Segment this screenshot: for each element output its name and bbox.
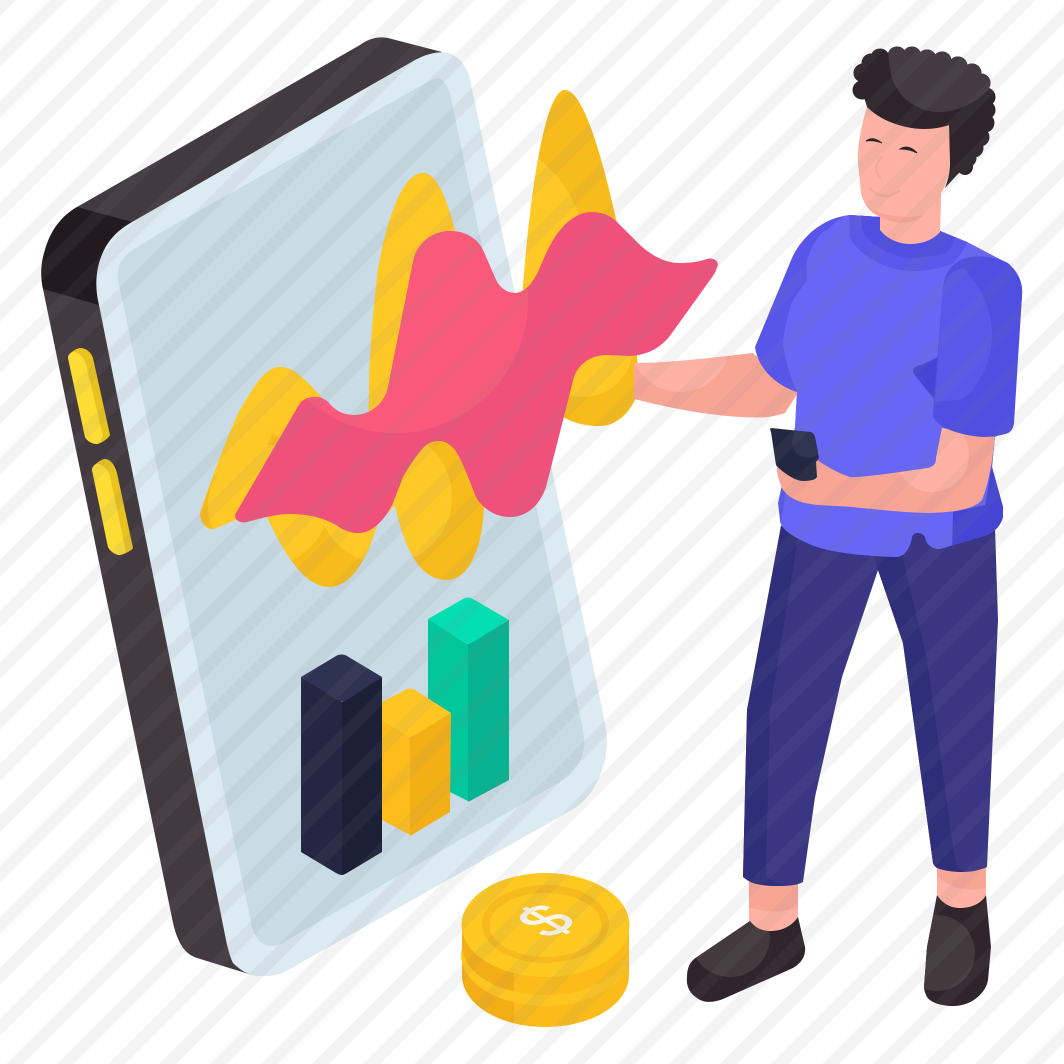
red wave xyxy=(235,212,718,533)
underarm shadow xyxy=(913,357,938,399)
extended arm xyxy=(634,353,797,418)
holding arm xyxy=(776,428,995,513)
dark bar xyxy=(301,654,382,875)
eye right xyxy=(900,147,917,153)
green bar xyxy=(428,598,509,802)
left shoe xyxy=(686,917,806,1002)
phone dark body xyxy=(41,37,442,975)
yellow bar xyxy=(382,688,451,836)
right sleeve xyxy=(933,256,1022,437)
neck overlap xyxy=(880,200,941,244)
hair xyxy=(852,46,996,188)
shirt xyxy=(755,215,1022,557)
phone glass frame xyxy=(96,52,607,976)
coin stack xyxy=(461,873,630,1027)
shirt light body xyxy=(781,215,1022,557)
phone screen xyxy=(118,78,584,946)
left ankle xyxy=(749,870,798,935)
collar outer ring xyxy=(849,212,967,271)
person xyxy=(630,40,1030,1006)
collar inner ring xyxy=(861,212,954,258)
coin top face xyxy=(462,873,630,977)
upper coin side xyxy=(462,925,629,995)
coin ring xyxy=(482,885,609,963)
right shoe xyxy=(924,895,991,1006)
pants xyxy=(743,500,998,886)
lower coin side xyxy=(462,925,629,1027)
smile xyxy=(870,188,899,196)
small phone in hand xyxy=(770,428,819,481)
left leg shadow xyxy=(743,526,798,886)
phone illustration xyxy=(41,37,718,976)
eye left xyxy=(866,139,882,143)
hair highlight xyxy=(888,46,990,112)
dollar sign: $ xyxy=(501,895,591,947)
neck and face xyxy=(858,100,950,244)
right leg shadow xyxy=(875,555,963,872)
yellow wave xyxy=(200,90,638,587)
phone corner block xyxy=(41,207,132,305)
lower coin rim xyxy=(461,904,629,1006)
nose xyxy=(876,157,882,178)
chin line xyxy=(868,208,924,223)
right ankle xyxy=(937,855,986,911)
shirt hem shadow xyxy=(952,466,1003,546)
side button upper xyxy=(68,348,110,444)
side button lower xyxy=(92,459,133,555)
